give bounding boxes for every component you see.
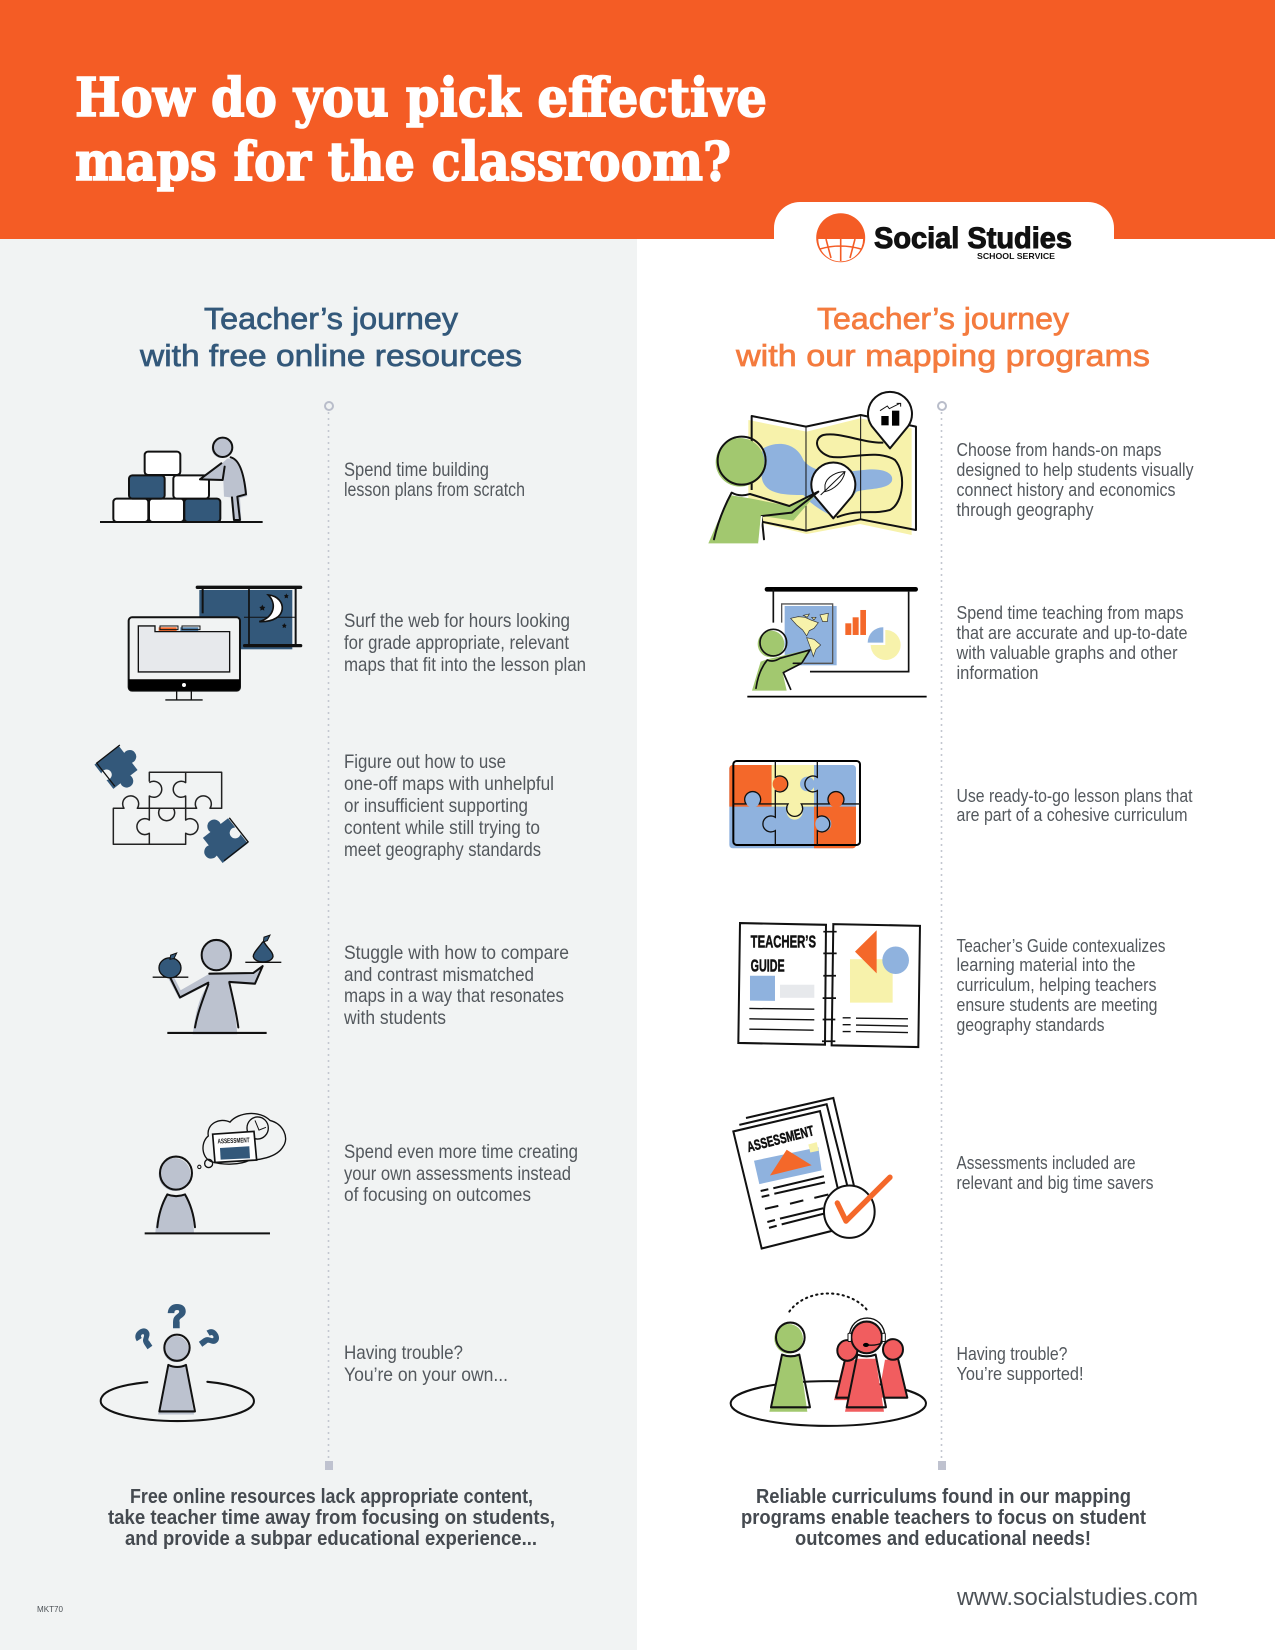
conclusion: mapping programs: outcomes and educational needs! <box>795 1528 1091 1550</box>
text: teacher's guide: learning material into the <box>956 954 1136 975</box>
conclusion: free resources <box>108 1486 555 1550</box>
text: teacher's guide <box>956 935 1166 1035</box>
text: teacher's guide: curriculum, helping teachers <box>956 974 1156 995</box>
icon: mismatched puzzle pieces <box>95 741 248 868</box>
conclusion: mapping programs: programs enable teachers to focus on student <box>741 1507 1146 1529</box>
icon: thinking about assessments: ASSESSMENT <box>217 1137 250 1146</box>
timeline: left <box>325 402 333 1470</box>
icon: teacher's guide binder: GUIDE <box>751 955 785 975</box>
text: hands-on maps: connect history and economics <box>956 479 1176 500</box>
text: assessments included: relevant and big time savers <box>956 1172 1154 1193</box>
text: one-off maps: or insufficient supporting <box>344 795 528 817</box>
text: creating assessments: your own assessments instead <box>344 1163 571 1185</box>
title <box>75 67 767 193</box>
text: surf the web: Surf the web for hours looking <box>344 610 570 632</box>
text: surf the web <box>344 610 586 676</box>
website url: www.socialstudies.com <box>956 1584 1198 1611</box>
text: compare and contrast: Stuggle with how to compare <box>344 942 569 964</box>
timeline: right <box>938 402 946 1470</box>
text: hands-on maps <box>956 439 1194 520</box>
title: maps for the classroom? <box>75 131 731 193</box>
icon: stacking blocks <box>100 438 263 522</box>
text: teacher's guide: geography standards <box>956 1014 1104 1035</box>
icon: confused teacher alone: ? <box>193 1325 224 1354</box>
icon: supported teacher with team <box>731 1293 926 1426</box>
text: teacher's guide: Teacher’s Guide contexualizes <box>956 935 1166 956</box>
logo <box>774 202 1114 262</box>
conclusion: free resources: and provide a subpar educational experience... <box>125 1528 537 1550</box>
heading: free online resources: Teacher’s journey <box>204 301 459 336</box>
text: cohesive curriculum: are part of a cohesive curriculum <box>956 804 1188 825</box>
conclusion: mapping programs: Reliable curriculums found in our mapping <box>756 1486 1131 1508</box>
text: one-off maps: meet geography standards <box>344 839 541 861</box>
text: on your own: Having trouble? <box>344 1342 463 1364</box>
logo: SCHOOL SERVICE <box>977 251 1055 261</box>
text: teacher's guide: ensure students are meeting <box>956 994 1158 1015</box>
heading: mapping programs <box>735 301 1150 373</box>
text: one-off maps: one-off maps with unhelpful <box>344 773 554 795</box>
panel: mapping programs <box>708 301 1198 1611</box>
text: teaching from maps: Spend time teaching from maps <box>956 602 1184 623</box>
text: surf the web: maps that fit into the lesson plan <box>344 654 586 676</box>
text: compare and contrast: maps in a way that resonates <box>344 985 564 1007</box>
icon: teaching from projected map <box>747 589 927 697</box>
text: you're supported <box>956 1343 1084 1384</box>
text: compare and contrast <box>343 942 569 1029</box>
text: hands-on maps: designed to help students visually <box>956 459 1194 480</box>
text: teaching from maps: that are accurate and up-to-date <box>956 622 1188 643</box>
text: on your own <box>344 1342 508 1386</box>
icon: confused teacher alone: ? <box>168 1299 186 1334</box>
text: one-off maps: Figure out how to use <box>344 751 506 773</box>
text: compare and contrast: and contrast mismatched <box>344 964 534 986</box>
text: creating assessments <box>344 1141 578 1206</box>
document code: MKT70 <box>37 1604 63 1614</box>
text: creating assessments: Spend even more time creating <box>344 1141 578 1163</box>
icon: comparing apple and pear <box>153 935 281 1034</box>
icon: teacher's guide binder: TEACHER’S <box>751 931 816 952</box>
icon: graded assessment: ASSESSMENT <box>745 1123 816 1156</box>
text: teaching from maps: with valuable graphs and other <box>956 642 1178 663</box>
heading: mapping programs: with our mapping programs <box>735 338 1150 373</box>
text: teaching from maps: information <box>956 662 1038 683</box>
text: building lesson plans: Spend time building <box>344 459 489 481</box>
text: one-off maps: content while still trying to <box>344 817 540 839</box>
icon: thinking about assessments <box>145 1113 286 1233</box>
icon: teacher's guide binder <box>738 923 920 1047</box>
conclusion: free resources: Free online resources lack appropriate content, <box>130 1486 533 1508</box>
text: building lesson plans <box>344 459 525 501</box>
text: hands-on maps: Choose from hands-on maps <box>956 439 1162 460</box>
heading: free online resources: with free online resources <box>139 338 522 373</box>
text: compare and contrast: with students <box>343 1007 446 1029</box>
panel: free online resources <box>0 239 637 1650</box>
header band <box>0 0 1275 239</box>
text: assessments included: Assessments included are <box>956 1152 1136 1173</box>
text: on your own: You’re on your own... <box>344 1364 508 1386</box>
text: building lesson plans: lesson plans from scratch <box>344 479 525 501</box>
heading: mapping programs: Teacher’s journey <box>817 301 1070 336</box>
text: cohesive curriculum: Use ready-to-go lesson plans that <box>956 785 1192 806</box>
text: one-off maps <box>344 751 554 861</box>
icon: confused teacher alone: ? <box>131 1323 159 1356</box>
text: hands-on maps: through geography <box>956 499 1094 520</box>
icon: teacher pointing at map <box>708 392 916 543</box>
logo: Social Studies <box>874 222 1072 255</box>
title: How do you pick effective <box>75 67 767 129</box>
icon: graded assessment <box>733 1098 890 1249</box>
icon: completed puzzle <box>729 761 860 848</box>
icon: confused teacher alone <box>101 1299 254 1421</box>
heading: free online resources <box>139 301 522 373</box>
text: you're supported: Having trouble? <box>956 1343 1068 1364</box>
text: assessments included <box>956 1152 1154 1193</box>
conclusion: free resources: take teacher time away from focusing on students, <box>108 1507 555 1529</box>
icon: computer at night <box>129 587 301 700</box>
text: surf the web: for grade appropriate, relevant <box>344 632 569 654</box>
text: teaching from maps <box>956 602 1188 683</box>
text: creating assessments: of focusing on outcomes <box>344 1184 531 1206</box>
text: cohesive curriculum <box>956 785 1192 825</box>
text: you're supported: You’re supported! <box>956 1363 1084 1384</box>
conclusion: mapping programs <box>741 1486 1146 1550</box>
